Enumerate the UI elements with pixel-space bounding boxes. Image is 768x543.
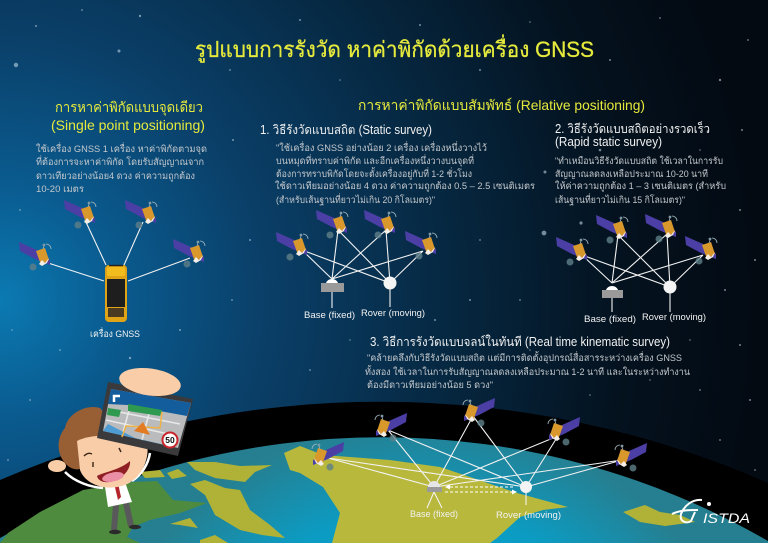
text block: rapid static survey [555,155,726,206]
text block: single point description: 10-20 เมตร [36,184,84,195]
icon: rapid satellites [556,214,717,266]
earth: dark atmosphere band [0,402,768,543]
labels: rapid base and rover: Base (fixed) [584,314,636,325]
labels: RTK base and rover: Rover (moving) [496,510,561,521]
continent: green left [0,481,207,543]
continent: yellow islands [140,462,695,543]
diagram: rapid static signal lines [582,234,703,312]
illustration: man holding navigation tablet [48,364,193,534]
eyes [84,448,121,467]
icon: GNSS handheld device [105,265,127,322]
logo: GISTDA [672,500,750,526]
tablet map details [103,396,180,448]
continent: centre land [284,446,568,543]
heading: rapid static survey: 2. วิธีรังวัดแบบสถิตอย่างรวดเร็ว [555,121,710,136]
icon: rapid base station [602,286,623,298]
logo mark: G swoosh [672,500,702,522]
text block: single point description: ที่ต้องการจะหาค่าพิกัด โดยรับสัญญาณจาก [36,155,204,168]
text block: single point description: ใช้เครื่อง GNSS 1 เครื่อง หาค่าพิกัดตามจุด [36,142,207,155]
panel: static survey [260,123,535,321]
hand on tablet [117,364,183,400]
text block: static survey: ต้องการทราบพิกัดโดยจะตั้งเครื่องอยู่กับที่ 1-2 ชั่วโมง [276,167,472,180]
text block: static survey: "ใช้เครื่อง GNSS อย่างน้อย 2 เครื่อง เครื่องหนึ่งวางไว้ [276,141,487,154]
panel: rapid static survey [555,121,726,325]
text block: single point description [36,142,207,195]
tablet frame [97,382,193,456]
label: GNSS device: เครื่อง GNSS [90,327,140,340]
labels: base and rover: Base (fixed) [304,310,355,321]
heading: single point: (Single point positioning) [51,117,205,133]
text block: static survey: บนหมุดที่ทราบค่าพิกัด และอีกเครื่องหนึ่งวางบนจุดที่ [276,154,474,167]
icon: rapid rover [664,280,676,294]
panel: single point positioning [19,99,207,340]
icon: rover [384,276,396,290]
diagram: satellite signal lines to device [45,220,190,281]
icon: RTK base station [427,481,442,492]
labels: base and rover: Rover (moving) [361,308,425,319]
heading: single point [51,99,205,133]
tablet header [108,389,191,416]
text block: RTK survey: ต้องมีดาวเทียมอย่างน้อย 5 ดวง" [367,379,493,391]
icon: RTK satellites [312,398,647,472]
arms [65,453,150,488]
panel: real time kinematic survey [312,335,690,521]
text block: RTK survey [365,351,690,391]
face [77,436,148,488]
text block: rapid static survey: ให้ค่าความถูกต้อง 1 – 3 เซนติเมตร (สำหรับ [555,180,726,192]
shirt and tie [105,482,132,507]
mouth [97,461,130,482]
tablet screen [103,389,191,448]
arrows: base and rover radio link [445,484,517,494]
heading: rapid static survey [555,121,710,149]
labels: base and rover [304,308,425,321]
text block: static survey [275,141,535,206]
text block: rapid static survey: "ทำเหมือนวิธีรังวัดแบบสถิต ใช้เวลาในการรับ [555,155,723,167]
heading: single point: การหาค่าพิกัดแบบจุดเดียว [55,99,203,116]
labels: rapid base and rover [584,312,706,325]
text block: rapid static survey: สัญญาณลดลงเหลือประมาณ 10-20 นาที [555,168,708,180]
heading: RTK survey: 3. วิธีการรังวัดแบบจลน์ในทันที (Real time kinematic survey) [370,335,670,349]
text block: RTK survey: "คล้ายคลึงกับวิธีรังวัดแบบสถิต แต่มีการติดตั้งอุปกรณ์สื่อสารระหว่างเครื่อง GNSS [367,351,682,364]
labels: RTK base and rover: Base (fixed) [410,509,458,520]
diagram: RTK signal lines [328,416,622,508]
title: รูปแบบการรังวัด หาค่าพิกัดด้วยเครื่อง GNSS [195,34,594,63]
labels: RTK base and rover [410,509,561,521]
hair [59,407,110,469]
text block: rapid static survey: เส้นฐานที่ยาวไม่เกิน 15 กิโลเมตร)" [555,193,685,206]
text block: static survey: (สำหรับเส้นฐานที่ยาวไม่เกิน 20 กิโลเมตร)" [276,193,435,206]
icon: RTK rover [520,481,532,493]
text block: single point description: ดาวเทียวอย่างน้อย4 ดวง ค่าความถูกต้อง [36,170,195,182]
heading: static survey: 1. วิธีรังวัดแบบสถิต (Static survey) [260,123,432,137]
diagram: static survey signal lines [302,230,423,308]
hand: left [48,460,66,472]
icon: static satellites [276,210,437,260]
logo dot [707,502,711,506]
heading: relative positioning: การหาค่าพิกัดแบบสัมพัทธ์ (Relative positioning) [358,97,645,113]
earth: globe with continents [0,437,768,543]
logo wordmark: ISTDA [703,511,750,526]
speed limit sign [162,432,178,448]
labels: rapid base and rover: Rover (moving) [642,312,706,323]
text block: RTK survey: ทั้งสอง ใช้เวลาในการรับสัญญาณลดลงเหลือประมาณ 1-2 นาที และในระหว่างทำงาน [365,365,690,378]
legs and shoes [109,503,141,534]
icon: satellites [19,200,205,270]
icon: base station [321,279,344,292]
text block: static survey: ใช้ดาวเทียมอย่างน้อย 4 ดวง ค่าความถูกต้อง 0.5 – 2.5 เซนติเมตร [275,180,535,192]
speed limit sign: 50 [165,435,175,445]
heading: rapid static survey: (Rapid static survey) [555,135,662,149]
